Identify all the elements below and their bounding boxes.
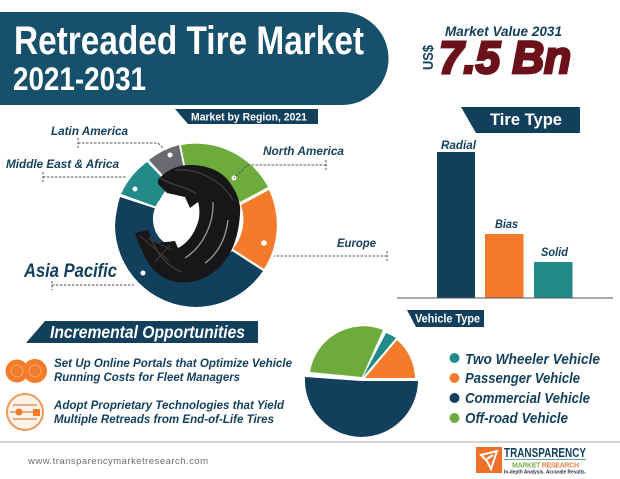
vehicle type heading: Vehicle Type xyxy=(415,314,480,326)
label: Europe xyxy=(274,238,387,261)
subtitle years: 2021-2031 xyxy=(13,61,146,97)
legend item: Passenger: Passenger Vehicle xyxy=(465,370,580,387)
hole xyxy=(153,192,199,246)
tire type heading: Tire Type xyxy=(490,110,562,129)
opportunity text 2: Adopt Proprietary Technologies that Yield xyxy=(53,398,285,412)
tire type heading xyxy=(461,107,580,133)
bar: Radial: Radial xyxy=(441,140,477,152)
tread grooves xyxy=(185,202,228,263)
value figure: 7.5 Bn xyxy=(439,32,571,83)
legend item: Off-road: Off-road Vehicle xyxy=(465,410,568,427)
title banner xyxy=(0,12,389,105)
tire image xyxy=(135,165,240,283)
donut chart: market by region xyxy=(115,144,277,307)
segment: Europe xyxy=(233,190,277,269)
segment: Asia Pacific xyxy=(115,197,263,307)
label: Asia Pacific: Asia Pacific xyxy=(23,261,117,282)
bar chart: tire type xyxy=(397,140,613,298)
opportunity text 1: Running Costs for Fleet Managers xyxy=(54,370,240,384)
slice: Two Wheeler Vehicle xyxy=(363,333,396,377)
label: Latin America xyxy=(51,126,163,148)
slice: Passenger Vehicle xyxy=(365,340,415,378)
label: Europe: Europe xyxy=(337,238,377,250)
segment markers xyxy=(132,152,267,276)
icon: proprietary technologies xyxy=(7,394,43,430)
logo tagline: In-depth Analysis. Accurate Results. xyxy=(504,470,587,476)
label: Latin America: Latin America xyxy=(51,126,129,138)
label: Middle East and Africa: Middle East & Africa xyxy=(6,159,120,171)
legend item: Two Wheeler: Two Wheeler Vehicle xyxy=(465,351,600,368)
bar: Solid xyxy=(534,247,572,298)
website url: www.transparencymarketresearch.com xyxy=(27,456,208,467)
region heading: Market by Region, 2021 xyxy=(191,112,307,124)
market value callout xyxy=(421,24,571,83)
icon: online portals xyxy=(6,359,47,383)
logo wordmark: TRANSPARENCY xyxy=(504,445,586,460)
logo xyxy=(476,445,587,476)
logo mark xyxy=(476,447,502,473)
bar: Radial xyxy=(437,140,477,298)
slice: Commercial Vehicle xyxy=(305,377,418,437)
legend xyxy=(450,351,600,427)
opportunity text 1: Set Up Online Portals that Optimize Vehicle xyxy=(54,356,292,370)
opportunity text 2 xyxy=(53,398,285,426)
incremental opportunities heading: Incremental Opportunities xyxy=(50,322,245,342)
pie chart: vehicle type xyxy=(305,326,418,437)
vehicle type heading xyxy=(407,310,484,327)
market value callout: Market Value 2031 xyxy=(445,24,562,39)
segment: Latin America xyxy=(149,145,186,185)
legend item: Commercial: Commercial Vehicle xyxy=(465,390,590,407)
bar: Solid: Solid xyxy=(541,247,569,259)
bar: Bias xyxy=(485,219,524,298)
label: North America xyxy=(234,146,345,178)
label: North America: North America xyxy=(263,146,345,158)
opportunity text 1 xyxy=(54,356,292,384)
logo market research: MARKET RESEARCH xyxy=(512,462,579,470)
currency: US$ xyxy=(421,45,437,70)
slice: Off-road Vehicle xyxy=(310,326,383,377)
label: Asia Pacific xyxy=(23,261,134,290)
region heading xyxy=(175,109,318,124)
opportunity text 2: Multiple Retreads from End-of-Life Tires xyxy=(54,412,274,426)
bar: Bias: Bias xyxy=(495,219,518,231)
label: Middle East and Africa xyxy=(6,159,126,182)
title: Retreaded Tire Market xyxy=(14,19,364,63)
segment: Middle East and Africa xyxy=(121,162,170,207)
segment: North America xyxy=(181,144,268,202)
